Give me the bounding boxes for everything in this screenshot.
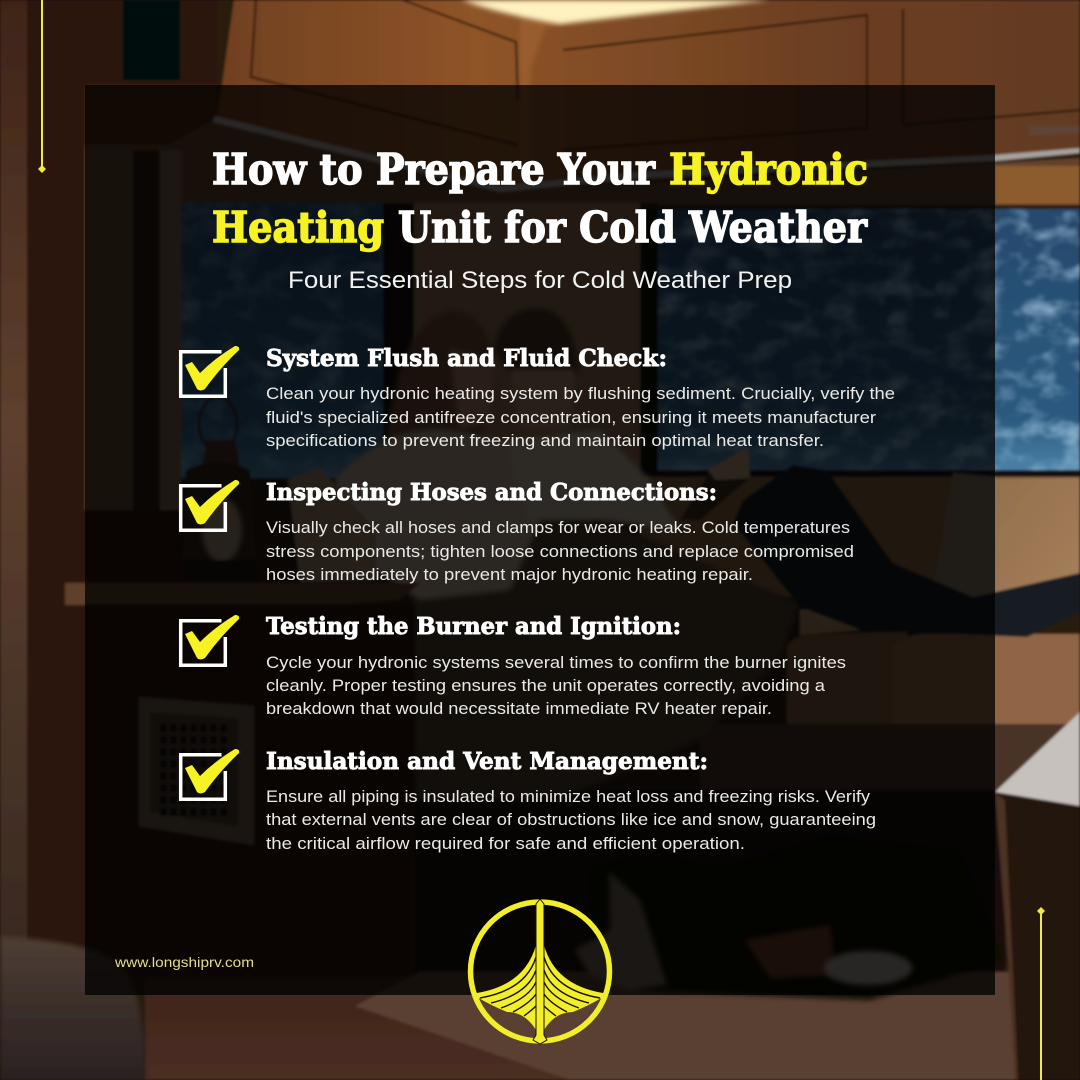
panel: dark translucent overlay — [85, 85, 995, 995]
title: Heating — [212, 203, 384, 252]
cabinet door lines — [251, 0, 1080, 150]
dog — [575, 835, 1005, 1000]
step 3: burner: cleanly. Proper testing ensures the unit operates correctly, avoiding a — [266, 676, 826, 695]
step 2: hoses: hoses immediately to prevent major hydronic heating repair. — [266, 565, 753, 584]
left window — [181, 203, 383, 478]
brown leg — [745, 925, 835, 978]
subtitle: Four Essential Steps for Cold Weather Prep — [288, 267, 792, 294]
step 1: system flush: System Flush and Fluid Check: — [266, 345, 667, 372]
wall vent — [139, 697, 254, 845]
paws — [824, 951, 912, 985]
step 3: burner: Testing the Burner and Ignition: — [266, 613, 681, 640]
step 3: burner — [181, 613, 846, 718]
right window — [655, 209, 1080, 471]
bottom-left couch — [0, 937, 145, 1080]
floor wood — [145, 975, 1080, 1080]
sweaters — [334, 430, 540, 600]
grey pillow — [933, 473, 996, 600]
title: How to Prepare Your — [212, 145, 656, 194]
cabinet handle — [1029, 126, 1080, 136]
step 3: burner: Cycle your hydronic systems several times to confirm the burner ignites — [266, 653, 846, 672]
checkbox 2 — [181, 480, 239, 530]
logo: longship in circle — [470, 899, 610, 1044]
left wall — [0, 0, 27, 940]
step 2: hoses: Visually check all hoses and clamps for wear or leaks. Cold temperatures — [266, 518, 850, 537]
dark speaker panel — [123, 0, 180, 80]
woman hair — [387, 310, 494, 450]
checkbox 4 — [181, 749, 239, 799]
grey rail — [213, 116, 1080, 192]
checkbox 3 — [181, 615, 239, 665]
checkbox 1 — [181, 346, 239, 396]
lower sofa front — [700, 724, 1080, 794]
decorative line bottom-right — [1037, 907, 1045, 1080]
throw pillow — [288, 468, 376, 582]
decorative line top-left — [38, 0, 46, 173]
website url: www.longshiprv.com — [114, 954, 254, 970]
step 4: insulation: the critical airflow required for safe and efficient operation. — [266, 834, 745, 853]
knit blanket — [410, 500, 800, 800]
title: Hydronic — [669, 145, 868, 194]
step 1: system flush — [181, 345, 895, 450]
dresser — [85, 604, 415, 976]
left wood pillar — [27, 0, 217, 960]
lower-right cabinet — [995, 793, 1080, 1080]
upper left under-cabinet shadow — [85, 85, 218, 150]
ceiling light — [462, 0, 770, 24]
right cushion — [995, 478, 1080, 600]
left hull — [477, 945, 536, 1030]
faces — [450, 350, 494, 430]
step 2: hoses: stress components; tighten loose connections and replace compromised — [266, 542, 854, 561]
step 1: system flush: specifications to prevent freezing and maintain optimal heat transfer. — [266, 431, 824, 450]
step 1: system flush: fluid's specialized antifreeze concentration, ensuring it meets manufacturer — [266, 408, 876, 427]
book — [680, 447, 750, 520]
pale foot — [800, 608, 860, 635]
table corner — [995, 712, 1080, 806]
rug — [355, 972, 1015, 1080]
man hair — [494, 308, 579, 390]
step 1: system flush: Clean your hydronic heating system by flushing sediment. Crucially, verify the — [266, 384, 895, 403]
couple — [288, 308, 680, 600]
lantern — [180, 397, 262, 582]
step 4: insulation: Insulation and Vent Management: — [266, 748, 708, 775]
title: Unit for Cold Weather — [398, 203, 868, 252]
dark floor shadow — [415, 790, 1005, 995]
white blaze — [575, 872, 667, 990]
step 2: hoses — [181, 479, 854, 584]
right hull — [544, 945, 603, 1030]
wall between windows — [414, 203, 650, 493]
title — [212, 145, 868, 252]
sofa back — [640, 477, 1080, 597]
step 2: hoses: Inspecting Hoses and Connections: — [266, 479, 717, 506]
window sill — [640, 470, 1080, 477]
sofa seat cushions — [787, 632, 1080, 730]
wall behind windows — [85, 118, 1080, 209]
step 4: insulation: Ensure all piping is insulated to minimize heat loss and freezing risks. Verify — [266, 787, 871, 806]
step 3: burner: breakdown that would necessitate immediate RV heater repair. — [266, 699, 772, 718]
jeans — [733, 465, 1080, 637]
step 4: insulation: that external vents are clear of obstructions like ice and snow, guaranteeing — [266, 810, 876, 829]
table top — [65, 583, 420, 605]
pillar — [383, 203, 414, 493]
step 4: insulation — [181, 748, 876, 853]
mast — [533, 899, 547, 1044]
upper cabinets — [216, 0, 1080, 190]
